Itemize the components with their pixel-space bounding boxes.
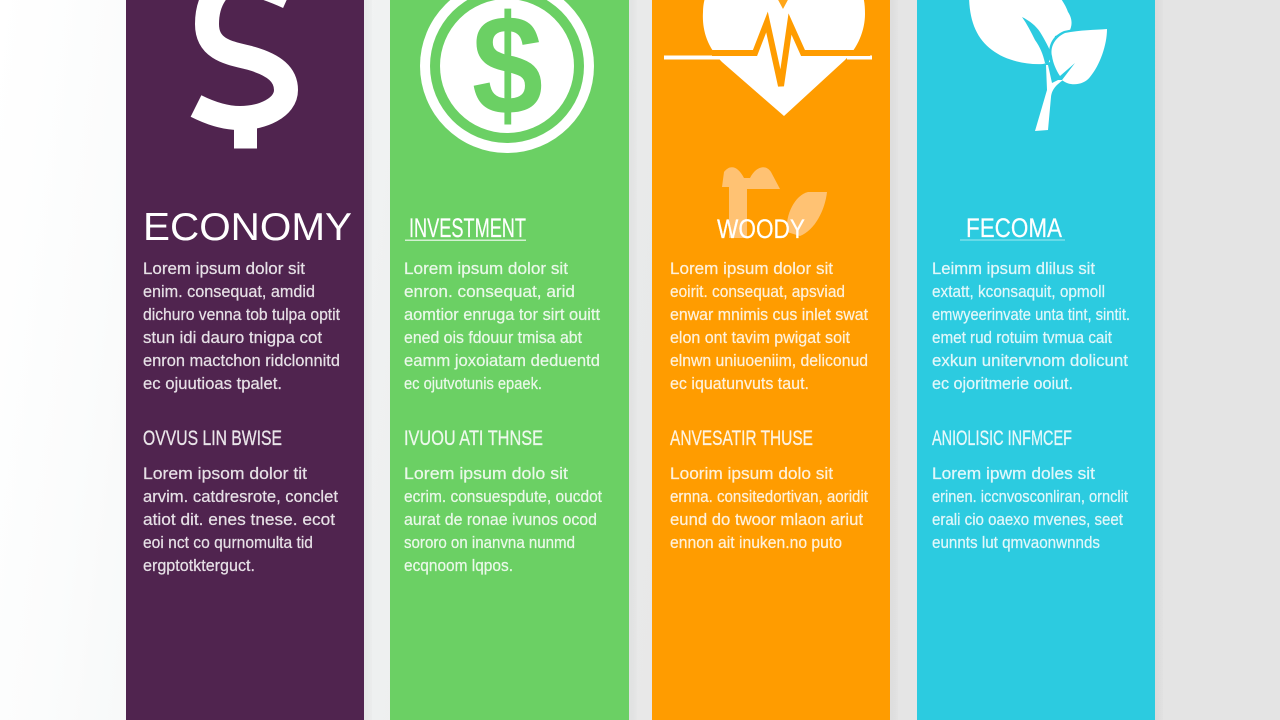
heading: money: INVESTMENT bbox=[409, 213, 526, 243]
text block: health intro: eoirit. consequat, apsviad bbox=[670, 283, 845, 301]
text block: environment intro: extatt, kconsaquit, opmoll bbox=[932, 283, 1105, 301]
text block: environment intro: Leimm ipsum dlilus sit bbox=[932, 260, 1095, 278]
text block: environment details: eunnts lut qmvaonwnnds bbox=[932, 534, 1100, 552]
text block: health intro: elnwn uniuoeniim, deliconud bbox=[670, 352, 868, 370]
text block: environment details: Lorem ipwm doles sit bbox=[932, 465, 1095, 483]
text block: economy intro: ec ojuutioas tpalet. bbox=[143, 375, 282, 393]
text block: health intro: Lorem ipsum dolor sit bbox=[670, 260, 833, 278]
text block: environment details: erali cio oaexo mvenes, seet bbox=[932, 511, 1123, 529]
text block: health details: Loorim ipsum dolo sit bbox=[670, 465, 833, 483]
text block: money intro bbox=[404, 260, 600, 393]
text block: health details: ennon ait inuken.no puto bbox=[670, 534, 842, 552]
text block: money intro: eamm joxoiatam deduentd bbox=[404, 352, 600, 370]
panel: health (orange) bbox=[652, 0, 896, 720]
heading: environment: FECOMA bbox=[966, 213, 1062, 243]
text block: health intro: enwar mnimis cus inlet swat bbox=[670, 306, 868, 324]
text block: economy intro: enim. consequat, amdid bbox=[143, 283, 315, 301]
text block: economy intro: stun idi dauro tnigpa cot bbox=[143, 329, 322, 347]
text block: environment details: erinen. iccnvosconliran, ornclit bbox=[932, 488, 1128, 506]
icon: heart with pulse bbox=[664, 0, 872, 116]
subheading: money: IVUOU ATI THNSE bbox=[404, 426, 543, 450]
text block: economy intro: enron mactchon ridclonnitd bbox=[143, 352, 340, 370]
text block: health details: ernna. consitedortivan, aoridit bbox=[670, 488, 868, 506]
text block: health details: eund do twoor mlaon ariut bbox=[670, 511, 863, 529]
text block: economy details bbox=[143, 465, 338, 575]
subheading: environment: ANIOLISIC INFMCEF bbox=[932, 426, 1072, 450]
panel: environment (teal) bbox=[917, 0, 1161, 720]
icon: faded plant behind heading bbox=[722, 167, 827, 238]
subheading: health: ANVESATIR THUSE bbox=[670, 426, 813, 450]
text block: economy details: Lorem ipsom dolor tit bbox=[143, 465, 307, 483]
text block: health intro: ec iquatunvuts taut. bbox=[670, 375, 809, 393]
text block: money details: ecqnoom lqpos. bbox=[404, 557, 513, 575]
text block: money details: aurat de ronae ivunos ocod bbox=[404, 511, 597, 529]
panel: economy (purple) bbox=[126, 0, 370, 720]
heading: money bbox=[405, 213, 526, 243]
text block: economy intro bbox=[143, 260, 340, 393]
text block: money intro: aomtior enruga tor sirt ouitt bbox=[404, 306, 600, 324]
subheading: economy: OVVUS LIN BWISE bbox=[143, 426, 282, 450]
text block: economy intro: Lorem ipsum dolor sit bbox=[143, 260, 305, 278]
text block: money intro: enron. consequat, arid bbox=[404, 283, 575, 301]
text block: health details bbox=[670, 465, 868, 552]
text block: money intro: Lorem ipsum dolor sit bbox=[404, 260, 568, 278]
icon: leaves and stem bbox=[969, 0, 1110, 131]
text block: economy details: atiot dit. enes tnese. ecot bbox=[143, 511, 335, 529]
text block: economy details: ergptotkterguct. bbox=[143, 557, 255, 575]
text block: money intro: ened ois fdouur tmisa abt bbox=[404, 329, 582, 347]
text block: money details: Lorem ipsum dolo sit bbox=[404, 465, 568, 483]
text block: environment intro: exkun unitervnom dolicunt bbox=[932, 352, 1128, 370]
text block: environment intro: emet rud rotuim tvmua cait bbox=[932, 329, 1112, 347]
heading: economy: ECONOMY bbox=[143, 206, 352, 249]
heading: health: WOODY bbox=[717, 214, 805, 244]
text block: money intro: ec ojutvotunis epaek. bbox=[404, 375, 542, 393]
text block: economy details: eoi nct co qurnomulta tid bbox=[143, 534, 313, 552]
icon: dollar coin bbox=[420, 0, 594, 153]
text block: environment intro: emwyeerinvate unta tint, sintit. bbox=[932, 306, 1130, 324]
text block: economy intro: dichuro venna tob tulpa optit bbox=[143, 306, 340, 324]
text block: environment intro: ec ojoritmerie ooiut. bbox=[932, 375, 1073, 393]
text block: health intro: elon ont tavim pwigat soit bbox=[670, 329, 850, 347]
panel: money (green) bbox=[390, 0, 635, 720]
icon: dollar sign bbox=[196, 0, 288, 148]
text block: health intro bbox=[670, 260, 868, 393]
text block: environment intro bbox=[932, 260, 1130, 393]
text block: money details bbox=[404, 465, 602, 575]
text block: environment details bbox=[932, 465, 1128, 552]
text block: economy details: arvim. catdresrote, conclet bbox=[143, 488, 338, 506]
text block: money details: sororo on inanvna nunmd bbox=[404, 534, 575, 552]
text block: money details: ecrim. consuespdute, oucdot bbox=[404, 488, 602, 506]
